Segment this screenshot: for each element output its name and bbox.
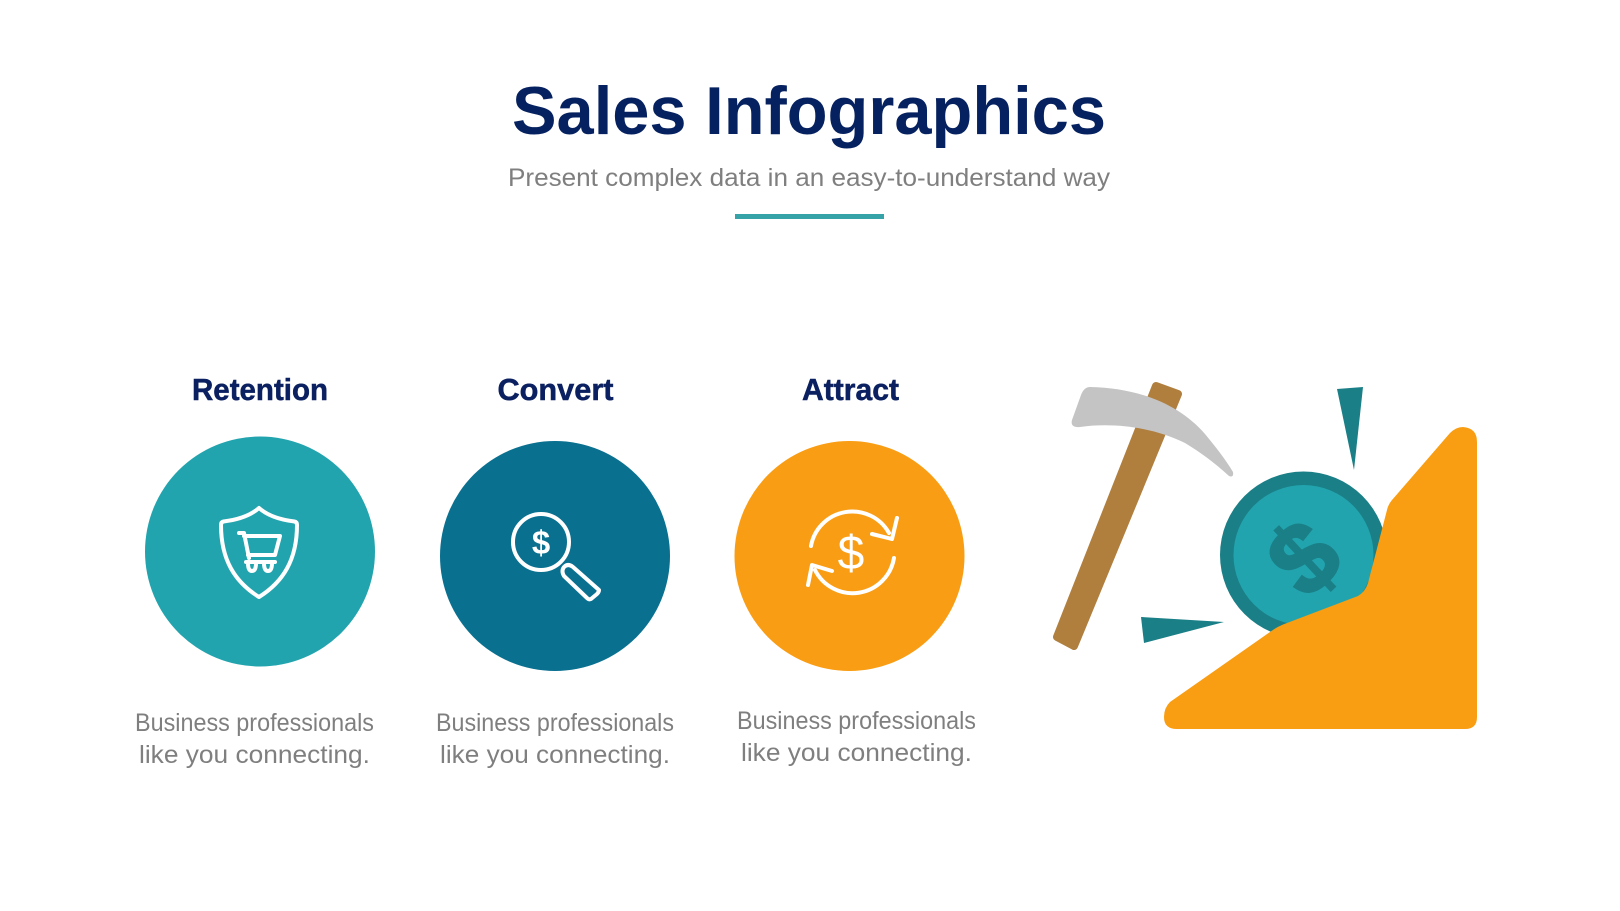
icon: dollar exchange arrows bbox=[808, 511, 897, 593]
description: attract: like you connecting. bbox=[741, 739, 972, 767]
coin: $ bbox=[1246, 498, 1363, 618]
panel: retention bbox=[135, 372, 375, 769]
coin bbox=[1220, 472, 1387, 638]
description: retention: Business professionals bbox=[135, 709, 374, 737]
panel: convert bbox=[436, 372, 674, 769]
icon: shield with shopping cart bbox=[221, 508, 297, 597]
heading: convert: Convert bbox=[498, 372, 614, 407]
circle: convert bbox=[440, 441, 670, 671]
header bbox=[508, 73, 1111, 219]
accent rule bbox=[735, 214, 884, 219]
spark: left bbox=[1141, 617, 1224, 643]
description: attract: Business professionals bbox=[737, 707, 976, 735]
pickaxe head bbox=[1072, 387, 1233, 476]
illustration: pickaxe mining a coin bbox=[1057, 386, 1477, 729]
icon: dollar exchange arrows: $ bbox=[838, 527, 864, 580]
heading: attract: Attract bbox=[802, 372, 899, 407]
subtitle: Present complex data in an easy-to-understand way bbox=[508, 164, 1111, 192]
heading: retention: Retention bbox=[192, 372, 328, 407]
icon: magnifier with dollar bbox=[513, 514, 599, 599]
description: convert: like you connecting. bbox=[440, 741, 670, 769]
description: convert: Business professionals bbox=[436, 709, 674, 737]
title: Sales Infographics bbox=[512, 73, 1106, 149]
circle: attract bbox=[734, 441, 964, 671]
mountain bbox=[1164, 427, 1477, 729]
icon: magnifier with dollar: $ bbox=[532, 524, 550, 561]
spark: top bbox=[1337, 387, 1363, 470]
pickaxe handle bbox=[1057, 386, 1178, 646]
circle: retention bbox=[145, 436, 375, 666]
panel: attract bbox=[734, 372, 976, 767]
description: retention: like you connecting. bbox=[139, 741, 370, 769]
